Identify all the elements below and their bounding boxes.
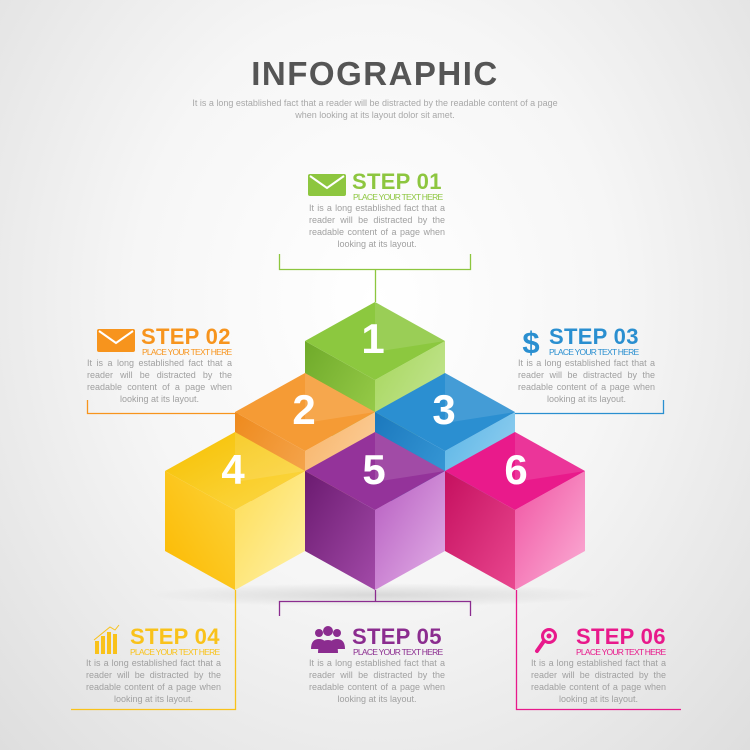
- step 01 text: It is a long established fact that a reader will be distracted by the readable content of a page when looking at its layout.: [309, 203, 445, 249]
- step 02 text: [87, 324, 232, 404]
- cube 1: [305, 302, 445, 460]
- step 06 text: [531, 624, 666, 704]
- connector: step 03: [510, 400, 664, 414]
- step 06 text: PLACE YOUR TEXT HERE: [576, 647, 665, 657]
- cube 2: [235, 373, 375, 531]
- connector: step 06: [516, 590, 681, 710]
- step 06 text: STEP 06: [576, 624, 666, 649]
- step 05 text: STEP 05: [352, 624, 442, 649]
- step 04 text: It is a long established fact that a reader will be distracted by the readable content of a page when looking at its layout.: [86, 658, 221, 704]
- cube 2: 2: [292, 386, 316, 433]
- cube 5: [305, 432, 445, 590]
- cube 4: 4: [221, 446, 245, 493]
- connector: step 01: [280, 254, 470, 302]
- step 04 text: [86, 624, 221, 704]
- icon: people step 05: [311, 626, 345, 653]
- step 02 text: It is a long established fact that a reader will be distracted by the readable content of a page when looking at its layout.: [87, 358, 232, 404]
- subtitle: when looking at its layout dolor sit amet.: [295, 110, 455, 120]
- step 03 text: It is a long established fact that a reader will be distracted by the readable content of a page when looking at its layout.: [518, 358, 655, 404]
- subtitle: [192, 98, 558, 120]
- icon: envelope step 02: [97, 329, 135, 352]
- step 01 text: STEP 01: [352, 169, 442, 194]
- step 06 text: It is a long established fact that a reader will be distracted by the readable content of a page when looking at its layout.: [531, 658, 666, 704]
- icon: dollar step 03: $: [522, 325, 540, 360]
- cube 3: 3: [432, 386, 456, 433]
- connector: step 05: [280, 590, 470, 616]
- step 04 text: PLACE YOUR TEXT HERE: [130, 647, 219, 657]
- step 03 text: [518, 324, 655, 404]
- cube 5: 5: [362, 446, 386, 493]
- step 05 text: PLACE YOUR TEXT HERE: [353, 647, 442, 657]
- title: INFOGRAPHIC: [251, 55, 499, 92]
- step 03 text: STEP 03: [549, 324, 639, 349]
- shadow: [145, 583, 605, 607]
- step 01 text: PLACE YOUR TEXT HERE: [353, 192, 442, 202]
- step 05 text: [309, 624, 445, 704]
- step 04 text: STEP 04: [130, 624, 220, 649]
- cube 1: 1: [361, 315, 385, 362]
- step 05 text: It is a long established fact that a reader will be distracted by the readable content of a page when looking at its layout.: [309, 658, 445, 704]
- subtitle: It is a long established fact that a reader will be distracted by the readable content of a page: [192, 98, 558, 108]
- connector: step 04: [71, 590, 236, 710]
- icon: envelope step 01: [308, 174, 346, 196]
- icon: bar chart step 04: [94, 625, 119, 654]
- step 01 text: [309, 169, 445, 249]
- icon: magnifier step 06: [537, 630, 556, 651]
- cube 3: [375, 373, 515, 531]
- cube 6: 6: [504, 446, 528, 493]
- cube 4: [165, 432, 305, 590]
- step 03 text: PLACE YOUR TEXT HERE: [549, 347, 638, 357]
- step 02 text: PLACE YOUR TEXT HERE: [142, 347, 231, 357]
- connector: step 02: [88, 400, 240, 414]
- step 02 text: STEP 02: [141, 324, 231, 349]
- cube 6: [445, 432, 585, 590]
